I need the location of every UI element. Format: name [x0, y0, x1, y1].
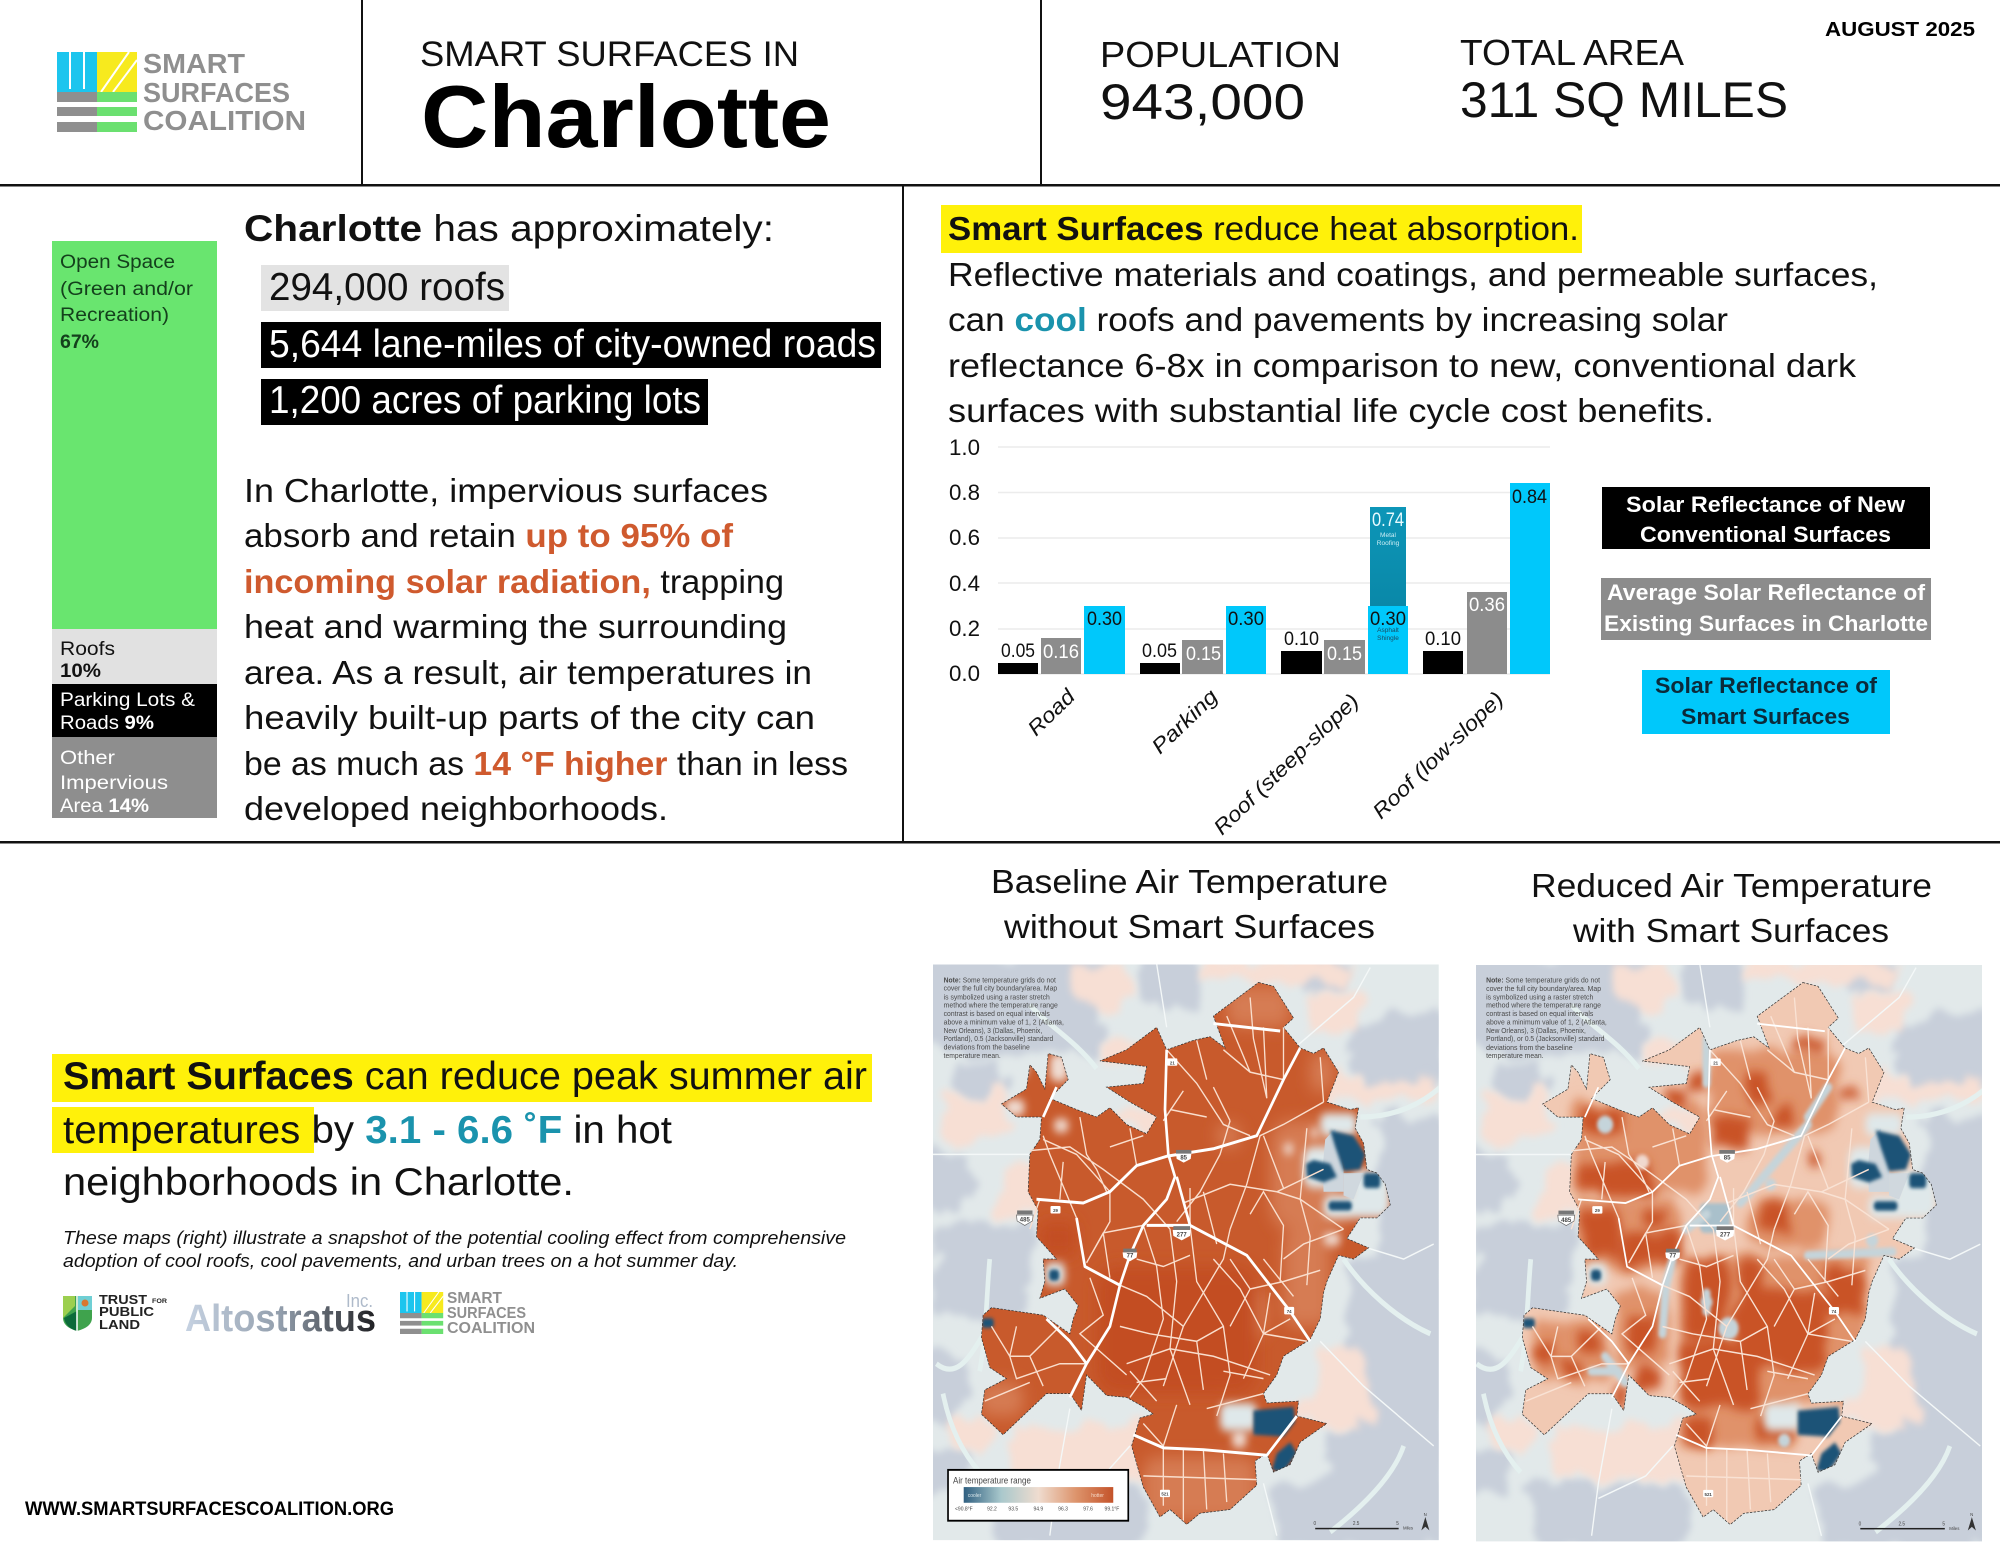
callout: reduce peak summer air temperatures [52, 1054, 872, 1204]
bars: road: 0.05 [1001, 641, 1035, 662]
stat: parking: 1,200 acres of parking lots [269, 379, 701, 422]
stat: population [1100, 34, 1341, 130]
callout: reduce peak summer air temperatures: neighborhoods in Charlotte. [63, 1161, 574, 1204]
paragraph: impervious surfaces: be as much as 14 °F higher than in less [244, 745, 848, 782]
paragraph: impervious surfaces: incoming solar radiation, trapping [244, 563, 784, 600]
logo: Smart Surfaces Coalition: SURFACES [143, 77, 290, 108]
logo: Smart Surfaces Coalition: SMART [143, 48, 245, 79]
header divider lines [0, 0, 2000, 844]
segment: parking lots and roads: Parking Lots & [60, 690, 195, 711]
paragraph: reflective materials: can cool roofs and pavements by increasing solar [948, 301, 1728, 338]
y axis labels: 0.4 [949, 571, 980, 596]
map note: Portland), 0.5 (Jacksonville) standard [944, 1035, 1053, 1043]
bars: roof steep-slope: 0.15 [1327, 644, 1362, 665]
y axis labels: 0.8 [949, 480, 980, 505]
legend: smart surfaces: Smart Surfaces [1681, 704, 1850, 729]
map legend: air temperature range: <90.8°F [955, 1506, 973, 1513]
y axis labels: 0.0 [949, 661, 980, 686]
map note: New Orleans), 3 (Dallas, Phoenix, [1486, 1027, 1586, 1035]
title: SMART SURFACES IN [420, 35, 799, 74]
map note: temperature mean. [1486, 1052, 1544, 1060]
map note: New Orleans), 3 (Dallas, Phoenix, [944, 1027, 1042, 1035]
map: reduced air temperature [1463, 956, 1997, 1545]
segment: open space [52, 241, 217, 629]
logo: Altostratus: Inc. [346, 1291, 373, 1311]
bars: roof steep-slope: Shingle [1377, 635, 1399, 642]
map note: cover the full city boundary/area. Map [944, 984, 1057, 993]
logo: Trust for Public Land: LAND [99, 1318, 140, 1332]
map title: reduced [1531, 867, 1932, 949]
paragraph: reflective materials: reflectance 6-8x in comparison to new, conventional dark [948, 347, 1857, 384]
map note: deviations from the baseline [1486, 1044, 1573, 1052]
map note: contrast is based on equal intervals [944, 1010, 1050, 1018]
map note: contrast is based on equal intervals [1486, 1010, 1594, 1018]
paragraph: reflective materials: Reflective materials and coatings, and permeable surfaces, [948, 256, 1878, 293]
title: Charlotte [421, 67, 831, 166]
map note: Note: Some temperature grids do not [944, 976, 1056, 985]
bars: roof steep-slope: 0.30 [1370, 609, 1406, 630]
map legend: air temperature range: Air temperature range [953, 1475, 1031, 1485]
map legend: air temperature range: 96.3 [1058, 1506, 1068, 1513]
paragraph: impervious surfaces: absorb and retain up to 95% of [244, 517, 734, 554]
date: AUGUST 2025 [1825, 19, 1975, 41]
paragraph: reflective materials [948, 256, 1878, 429]
logo: Trust for Public Land [63, 1293, 167, 1332]
land cover stacked bar [52, 241, 217, 818]
segment: other impervious: Impervious [60, 773, 168, 794]
bars: parking: 0.15 [1186, 644, 1221, 665]
map legend: air temperature range: 97.6 [1083, 1506, 1093, 1513]
paragraph: impervious surfaces: In Charlotte, impervious surfaces [244, 472, 768, 509]
logo: Trust for Public Land: PUBLIC [99, 1305, 154, 1319]
logo: Altostratus: Altostratus [185, 1298, 376, 1340]
segment: open space: Recreation) [60, 305, 169, 326]
bars: roof steep-slope [1281, 507, 1408, 674]
legend: existing surfaces [1601, 578, 1931, 640]
x axis labels: Parking [1147, 685, 1223, 759]
bars: roof low-slope: 0.84 [1512, 487, 1547, 508]
stat: road miles: 5,644 lane-miles of city-owned roads [269, 323, 876, 366]
callout: reduce peak summer air temperatures: Smart Surfaces can reduce peak summer air [63, 1055, 867, 1098]
map legend: air temperature range: 99.1°F [1105, 1506, 1120, 1513]
bars: road: 0.16 [1043, 642, 1079, 663]
x axis labels: Road [1023, 684, 1081, 741]
map legend: air temperature range [948, 1470, 1128, 1521]
paragraph: impervious surfaces: heat and warming the surrounding [244, 608, 787, 645]
x axis labels: Roof (steep-slope) [1209, 690, 1364, 840]
segment: parking lots and roads: Roads 9% [60, 713, 154, 734]
map legend: air temperature range: 93.5 [1008, 1506, 1018, 1513]
map note: Portland), or 0.5 (Jacksonville) standard [1486, 1035, 1604, 1043]
map legend: air temperature range: cooler [968, 1493, 982, 1499]
paragraph: impervious surfaces [244, 472, 848, 827]
callout: reduce peak summer air temperatures: temperatures by 3.1 - 6.6 ˚F in hot [63, 1109, 672, 1152]
segment: roofs: Roofs [60, 639, 115, 660]
segment: other impervious: Area 14% [60, 796, 149, 817]
y axis labels: 0.6 [949, 525, 980, 550]
bars: parking [1140, 606, 1266, 674]
logo: Smart Surfaces Coalition [57, 48, 306, 136]
map note: is symbolized using a raster stretch [1486, 993, 1593, 1001]
caption: maps note [63, 1227, 846, 1271]
bars: road [998, 606, 1125, 674]
heading: reduce heat absorption: Smart Surfaces reduce heat absorption. [948, 210, 1579, 247]
map note: temperature mean. [944, 1052, 1001, 1060]
map title: baseline: Baseline Air Temperature [991, 863, 1388, 900]
map legend: air temperature range: hotter [1091, 1493, 1104, 1499]
bar chart: solar reflectance [949, 435, 1550, 840]
logo: Trust for Public Land: TRUST [99, 1293, 147, 1307]
map note [1486, 976, 1607, 1060]
stat: total area: TOTAL AREA [1460, 32, 1684, 73]
segment: open space: Open Space [60, 252, 175, 273]
paragraph: impervious surfaces: heavily built-up parts of the city can [244, 699, 815, 736]
bars: parking: 0.05 [1142, 641, 1177, 662]
bars: parking: 0.30 [1228, 609, 1264, 630]
website: WWW.SMARTSURFACESCOALITION.ORG [25, 1499, 394, 1520]
bars: roof steep-slope: Roofing [1377, 540, 1400, 547]
map legend: air temperature range: 92.2 [987, 1506, 997, 1513]
bars: roof steep-slope: 0.10 [1284, 629, 1319, 650]
map note: is symbolized using a raster stretch [944, 993, 1050, 1001]
stat: total area [1460, 32, 1788, 128]
y axis labels: 0.2 [949, 616, 980, 641]
map legend: air temperature range: 94.9 [1033, 1506, 1043, 1513]
legend: smart surfaces: Solar Reflectance of [1655, 673, 1878, 698]
caption: maps note: These maps (right) illustrate a snapshot of the potential cooling effect from comprehensive [63, 1227, 846, 1248]
logo: Smart Surfaces Coalition small: COALITION [447, 1320, 535, 1337]
segment: open space: (Green and/or [60, 279, 194, 300]
paragraph: reflective materials: surfaces with substantial life cycle cost benefits. [948, 392, 1714, 429]
legend: existing surfaces: Average Solar Reflectance of [1607, 580, 1926, 605]
stat: total area: 311 SQ MILES [1460, 72, 1788, 128]
paragraph: impervious surfaces: area. As a result, air temperatures in [244, 654, 812, 691]
y axis labels [949, 435, 980, 686]
map title: reduced: with Smart Surfaces [1572, 912, 1889, 949]
map title: reduced: Reduced Air Temperature [1531, 867, 1932, 904]
map: baseline air temperature [923, 956, 1450, 1545]
bars: roof low-slope: 0.10 [1425, 629, 1461, 650]
segment: other impervious [52, 737, 217, 818]
caption: maps note: adoption of cool roofs, cool pavements, and urban trees on a hot summer day. [63, 1250, 738, 1271]
logo: Trust for Public Land: FOR [152, 1298, 167, 1305]
legend: existing surfaces: Existing Surfaces in Charlotte [1604, 611, 1928, 636]
map note: deviations from the baseline [944, 1043, 1030, 1052]
stat: roofs: 294,000 roofs [269, 266, 505, 309]
map note [944, 976, 1064, 1060]
segment: other impervious: Other [60, 748, 116, 769]
logo: Smart Surfaces Coalition small: SMART [447, 1290, 502, 1307]
bars: road: 0.30 [1087, 609, 1122, 630]
paragraph: impervious surfaces: developed neighborhoods. [244, 790, 668, 827]
map title: baseline [991, 863, 1388, 945]
logo: Smart Surfaces Coalition: COALITION [143, 105, 306, 136]
stat: population: POPULATION [1100, 34, 1341, 75]
map note: Note: Some temperature grids do not [1486, 976, 1600, 985]
logo: Smart Surfaces Coalition small: SURFACES [447, 1305, 526, 1322]
stat: population: 943,000 [1100, 74, 1305, 130]
x axis labels [1023, 684, 1508, 840]
bars: roof steep-slope: 0.74 [1372, 510, 1404, 531]
map note: cover the full city boundary/area. Map [1486, 984, 1601, 993]
legend: new conventional surfaces: Solar Reflectance of New [1626, 492, 1906, 517]
segment: open space: 67% [60, 332, 99, 353]
map note: above a minimum value of 1, 2 (Atlanta, [1486, 1018, 1607, 1027]
y axis labels: 1.0 [949, 435, 980, 460]
logo: Smart Surfaces Coalition small [400, 1290, 535, 1337]
legend: new conventional surfaces: Conventional Surfaces [1640, 522, 1891, 547]
bars: roof low-slope: 0.36 [1469, 595, 1505, 616]
bars: roof low-slope [1423, 483, 1550, 674]
legend: smart surfaces [1642, 670, 1890, 734]
segment: parking lots and roads [52, 684, 217, 737]
map note: above a minimum value of 1, 2 (Atlanta, [944, 1018, 1064, 1026]
bars: roof steep-slope: Asphalt [1377, 627, 1399, 634]
map note: method where the temperature range [1486, 1001, 1601, 1010]
legend: new conventional surfaces [1602, 487, 1930, 549]
segment: roofs: 10% [60, 661, 101, 682]
segment: roofs [52, 629, 217, 684]
bars: roof steep-slope: Metal [1380, 532, 1396, 539]
map note: method where the temperature range [944, 1001, 1058, 1010]
x axis labels: Roof (low-slope) [1368, 688, 1508, 824]
map title: baseline: without Smart Surfaces [1003, 908, 1375, 945]
heading: Charlotte has approximately: Charlotte has approximately: [244, 208, 774, 249]
